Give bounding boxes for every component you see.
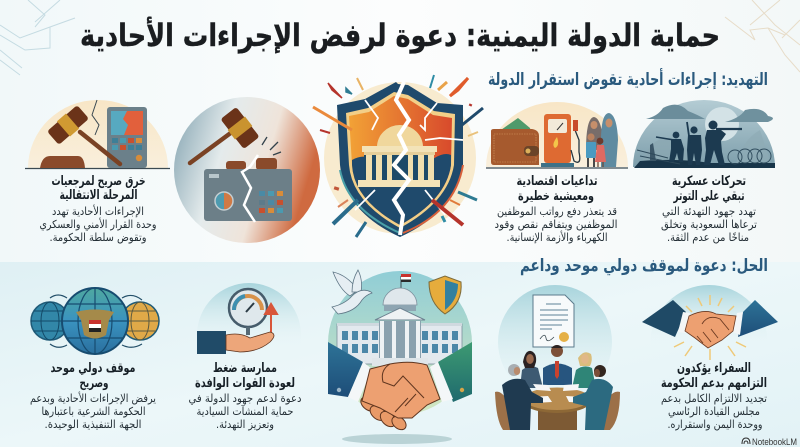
text: stance body: الجهة التنفيذية الوحيدة. xyxy=(44,418,142,431)
text: economic body: الموظفين ويتفاقم نقص وقود xyxy=(494,218,618,231)
text: ambassadors heading: السفراء يؤكدون xyxy=(677,361,751,376)
text: breach body: وحدة القرار الأمني والعسكري xyxy=(40,217,156,231)
icon: gavel and device xyxy=(25,100,170,168)
text: ambassadors body: تجديد الالتزام الكامل بدعم xyxy=(661,392,767,405)
text: stance heading xyxy=(50,361,136,391)
text: pressure heading xyxy=(195,361,295,391)
panel: unified international stance xyxy=(30,288,159,431)
panel: ambassadors xyxy=(642,285,778,431)
panel: applying pressure xyxy=(188,283,302,431)
icon: central handshake and capitol xyxy=(328,270,472,444)
panel: military movements xyxy=(633,100,775,244)
text: stance body: يرفض الإجراءات الأحادية وبدعم xyxy=(30,391,156,405)
text: military heading: تبقي على التوتر xyxy=(673,189,744,204)
text: military heading: تحركات عسكرية xyxy=(672,174,746,189)
text: military body: تهدد جهود التهدئة التي xyxy=(662,205,756,218)
panel: breach of references xyxy=(25,100,170,244)
text: stance heading: وصريح xyxy=(80,376,108,391)
icon: handshake with rays xyxy=(642,285,778,360)
text: ambassadors heading xyxy=(661,361,767,391)
text: pressure body: دعوة لدعم جهود الدولة في xyxy=(188,392,302,405)
text: breach body: الإجراءات الأحادية تهدد xyxy=(52,204,144,218)
text: economic body: قد يتعذر دفع رواتب الموظفين xyxy=(497,205,617,218)
icon: soldiers xyxy=(633,100,775,168)
text: economic heading: ومعيشية خطيرة xyxy=(518,189,594,204)
icon: gauge on hand with arrow xyxy=(197,283,301,354)
text: stance body xyxy=(30,391,156,431)
text: breach body: وتقوض سلطة الحكومة. xyxy=(50,231,146,244)
text: pressure body: وتعزيز التهدئة. xyxy=(216,418,274,431)
text: economic heading xyxy=(516,174,598,204)
text: ambassadors body: ووحدة اليمن واستقراره. xyxy=(668,418,762,431)
text: military heading xyxy=(672,174,746,204)
text: pressure heading: ممارسة ضغط xyxy=(213,361,277,376)
text: pressure heading: لعودة القوات الوافدة xyxy=(195,376,295,391)
icon: wallet, pump, family xyxy=(486,102,628,168)
text: military body: ترعاها السعودية وتخلق xyxy=(661,218,757,232)
icon: globes with emblem xyxy=(31,288,159,354)
text: breach body xyxy=(40,204,156,244)
icon: meeting and signed document xyxy=(495,285,620,430)
text: pressure body xyxy=(188,392,302,431)
text: economic body: الكهرباء والأزمة الإنسانية. xyxy=(506,230,608,244)
text: economic body xyxy=(494,205,618,244)
text: economic heading: تداعيات اقتصادية xyxy=(516,174,598,189)
text: ambassadors body: مجلس القيادة الرئاسي xyxy=(668,405,760,418)
text: breach heading: المرحلة الانتقالية xyxy=(60,188,138,203)
text: military body xyxy=(661,205,757,244)
icon: gavel and broken device circle xyxy=(174,97,320,243)
text: pressure body: حماية المنشآت السيادية xyxy=(196,404,294,418)
text: stance body: الحكومة الشرعية باعتبارها xyxy=(42,405,146,418)
text: breach heading: خرق صريح لمرجعيات xyxy=(52,174,146,189)
panel: economic impact xyxy=(486,102,628,244)
text: military body: مناخًا من عدم الثقة. xyxy=(667,231,749,244)
text: breach heading xyxy=(52,174,146,203)
icon: broken shield xyxy=(313,75,483,237)
text: ambassadors body xyxy=(661,392,767,431)
text: stance heading: موقف دولي موحد xyxy=(50,361,136,376)
